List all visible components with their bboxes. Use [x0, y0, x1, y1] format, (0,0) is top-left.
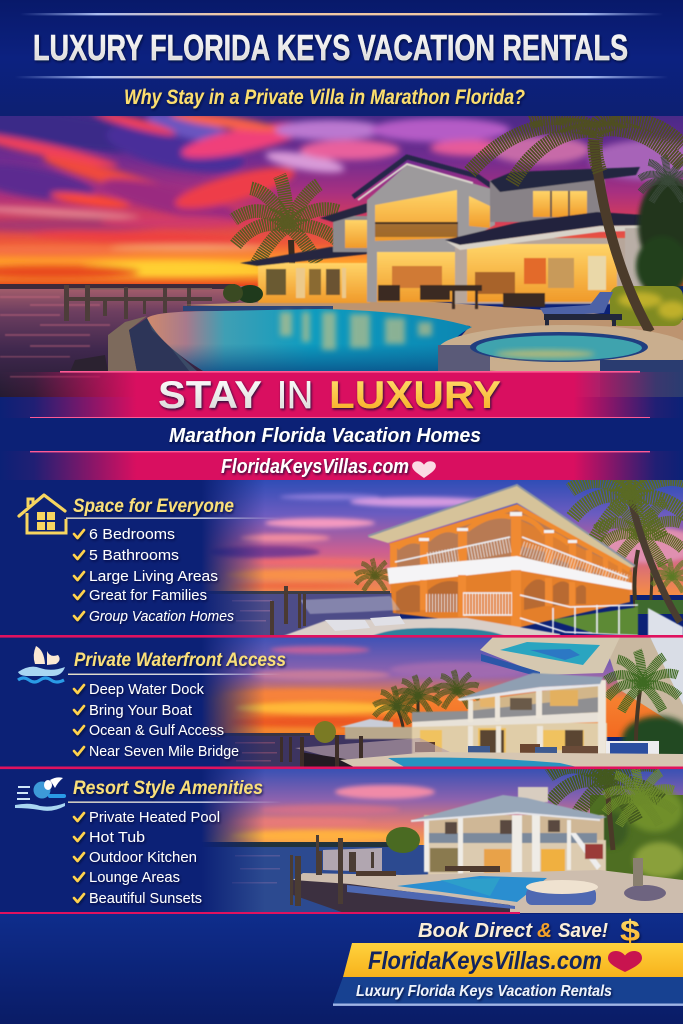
item: bring your boat: Bring Your Boat: [89, 702, 193, 719]
icon: sailboat: [18, 646, 65, 682]
item: great for families: Great for Families: [89, 587, 207, 604]
large palm: [566, 480, 683, 624]
right upper wing: [490, 167, 640, 222]
item: outdoor kitchen: Outdoor Kitchen: [89, 849, 197, 866]
trees: [549, 729, 683, 885]
yellow website band: [343, 943, 683, 977]
book direct and save: Save!: [558, 920, 608, 942]
swimming pool: [147, 309, 472, 372]
item: group vacation homes: Group Vacation Homes: [89, 608, 234, 625]
banner: marathon florida vacation homes: [0, 418, 683, 451]
deck and dock: [290, 835, 683, 915]
greenery and hedge: [223, 156, 683, 326]
footer: [0, 914, 683, 1024]
left wing: [240, 203, 370, 303]
panel: resort style amenities: [0, 729, 683, 915]
item: private heated pool: Private Heated Pool: [89, 809, 220, 826]
patio chairs: [356, 866, 500, 876]
panel: space for everyone: [204, 480, 683, 635]
list: space for everyone: [74, 526, 234, 625]
text fade: [0, 768, 265, 914]
white villa: [411, 787, 607, 876]
yellow website band: FloridaKeysVillas.com: [368, 947, 602, 975]
patio furniture and blue sign box: [415, 741, 659, 754]
heading: space for everyone: Space for Everyone: [73, 496, 234, 517]
item: lounge areas: Lounge Areas: [89, 869, 180, 886]
banner: marathon florida vacation homes: Marathon Florida Vacation Homes: [169, 425, 481, 447]
panel: hero villa photo: [0, 98, 683, 401]
palms behind villa: [355, 494, 683, 614]
banner: website: FloridaKeysVillas.com: [221, 456, 409, 478]
hot tub: [438, 325, 683, 400]
stay in: STAY: [158, 374, 262, 417]
wooden dock: [64, 285, 212, 321]
palms: [314, 670, 480, 743]
sky and water: [0, 768, 683, 915]
blue lounge chair: [540, 292, 622, 326]
item: ocean and gulf access: Ocean & Gulf Access: [89, 722, 224, 739]
icon: house: [19, 495, 66, 533]
upper floor interior: [396, 509, 632, 576]
item: beautiful sunsets: Beautiful Sunsets: [89, 890, 202, 907]
right lower wing: [445, 212, 645, 305]
icon: heart: [608, 951, 642, 972]
walkway, stone and deck: [70, 298, 683, 372]
orange beam and arches: [390, 507, 630, 570]
header banner: [0, 0, 683, 116]
orange villa: [280, 485, 683, 637]
dock: [280, 735, 450, 766]
list: private waterfront access: [74, 681, 239, 760]
item: near seven mile bridge: Near Seven Mile Bridge: [89, 743, 239, 760]
list: resort style amenities: [74, 809, 220, 907]
blue tagline band: [333, 977, 683, 1006]
book direct and save: Book Direct: [418, 920, 533, 942]
greenery: [606, 650, 683, 764]
luxury: LUXURY: [329, 374, 501, 417]
text fade: [0, 637, 265, 769]
banner: website: [0, 451, 683, 480]
dock posts and loungers: [270, 586, 405, 635]
roof soffit: [368, 485, 635, 568]
item: 6 bedrooms: 6 Bedrooms: [89, 526, 175, 543]
lower railing: [426, 593, 638, 635]
upper columns: [390, 515, 622, 583]
sunset sky: [0, 98, 683, 286]
text fade: [0, 480, 265, 637]
blue tagline band: Luxury Florida Keys Vacation Rentals: [356, 983, 612, 1000]
book direct and save: $: [620, 915, 640, 948]
left palm tree: [230, 172, 340, 264]
in: IN: [277, 374, 313, 417]
book direct and save: &: [537, 920, 552, 942]
panel separators: [0, 635, 683, 915]
subtitle: Why Stay in a Private Villa in Marathon Florida?: [124, 86, 525, 109]
banner: stay in luxury: [0, 371, 683, 419]
patio furniture: [378, 285, 545, 309]
heading: resort style amenities: Resort Style Amenities: [73, 778, 263, 799]
heading: private waterfront access: Private Waterfront Access: [74, 650, 286, 671]
top hot tub and deck: [480, 637, 683, 730]
large palm tree: [470, 115, 683, 332]
sky and water: [204, 480, 683, 635]
upper railing: [395, 537, 628, 582]
lower floor: [390, 568, 630, 628]
bottom pool and tub: [397, 858, 666, 905]
panel: private waterfront access: [204, 638, 683, 766]
icon: heart: [412, 461, 436, 478]
water and shoreline: [0, 284, 259, 397]
item: 5 bathrooms: 5 Bathrooms: [89, 547, 179, 564]
item: hot tub: Hot Tub: [89, 829, 145, 846]
villa: [240, 157, 675, 309]
patio and bottom pool: [340, 752, 683, 766]
item: large living areas: Large Living Areas: [89, 568, 218, 585]
sky and water: [204, 638, 670, 766]
central gabled block: [353, 157, 500, 302]
item: deep water dock: Deep Water Dock: [89, 681, 204, 698]
icon: swimmer: [15, 777, 66, 811]
book direct and save: [418, 915, 640, 948]
cream villa: [340, 673, 607, 756]
